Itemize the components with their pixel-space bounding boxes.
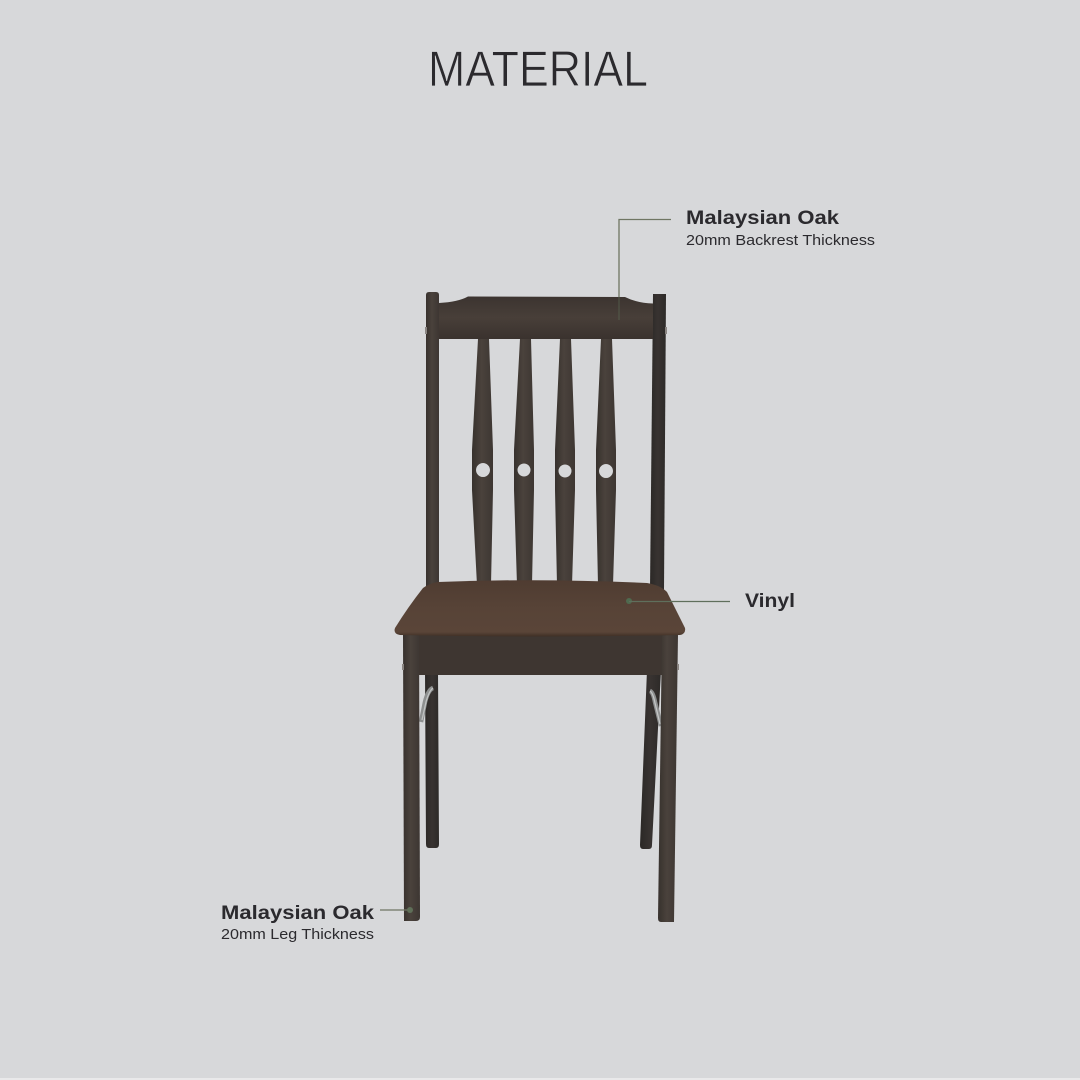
callout: vinyl seat — [626, 590, 795, 612]
label: vinyl: Vinyl — [745, 590, 795, 612]
chair back legs — [425, 670, 661, 849]
apron — [417, 634, 665, 675]
label: leg: 20mm Leg Thickness — [221, 927, 374, 943]
backrest slats with holes — [472, 339, 616, 585]
leader line and dot: leg — [380, 907, 413, 913]
leader line and dot: vinyl — [626, 598, 730, 604]
label: backrest: Malaysian Oak — [686, 207, 839, 229]
front legs — [402, 634, 679, 922]
title: MATERIAL — [428, 41, 648, 97]
label: leg: Malaysian Oak — [221, 902, 374, 924]
callout: backrest material — [619, 207, 875, 320]
vinyl seat — [395, 580, 685, 636]
label: leg — [221, 902, 374, 943]
leader line: backrest — [619, 220, 671, 320]
chair illustration — [395, 292, 685, 922]
label: backrest — [686, 207, 875, 249]
metal folding braces — [421, 688, 661, 726]
backrest posts — [425, 292, 667, 590]
callout: leg material — [221, 902, 413, 943]
label: backrest: 20mm Backrest Thickness — [686, 233, 875, 249]
top rail — [439, 296, 653, 339]
